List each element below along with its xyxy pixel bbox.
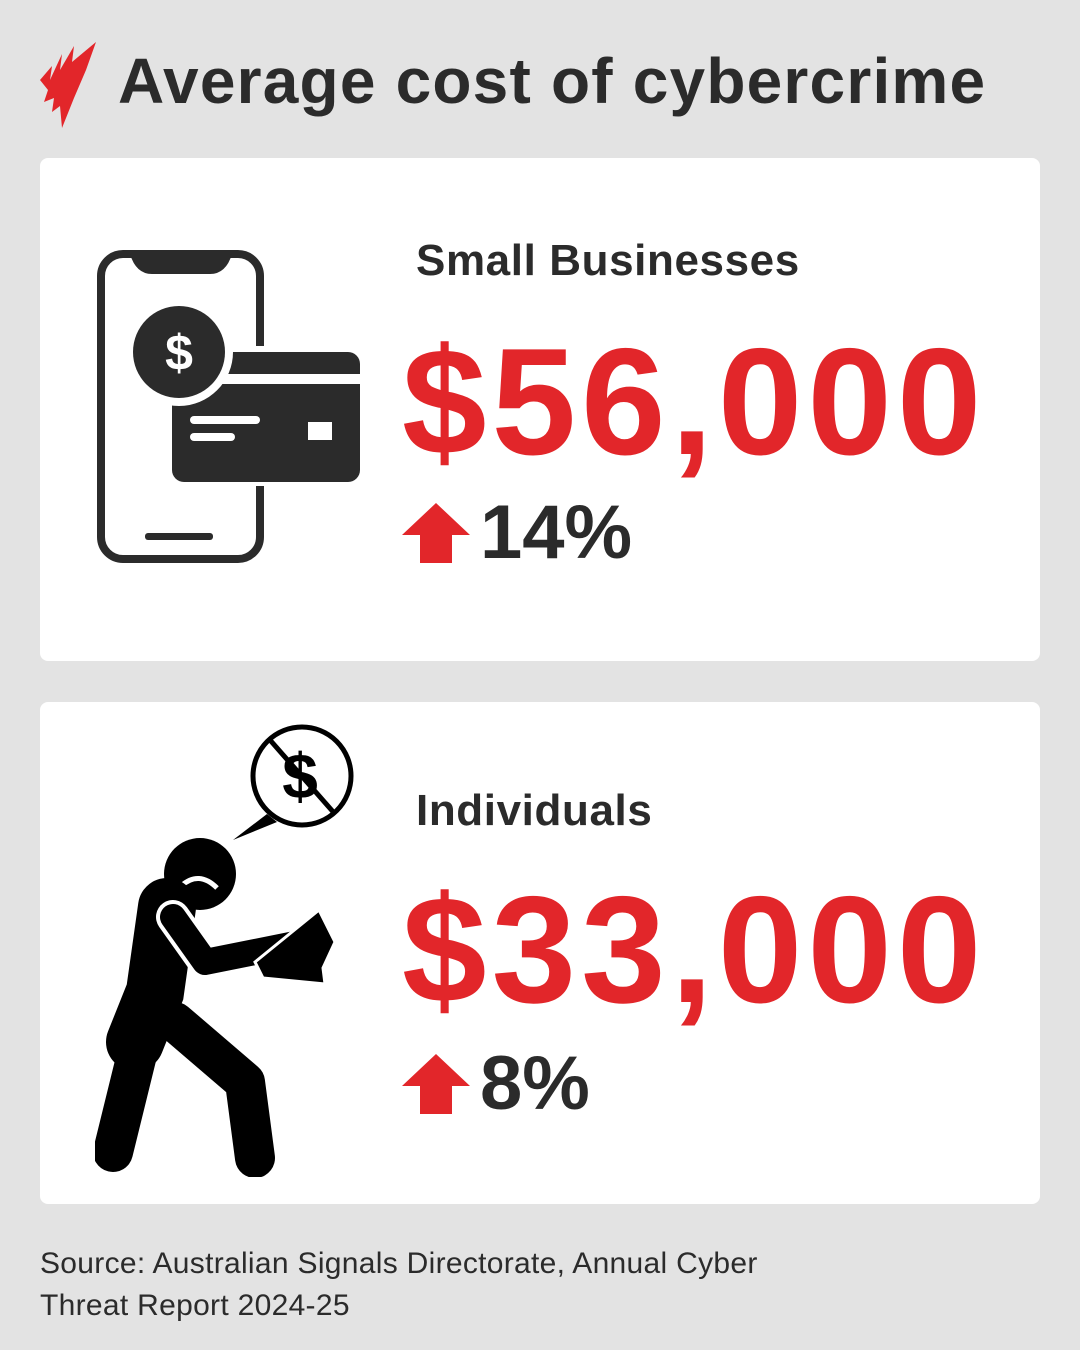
icon: phone with card: $ [165,325,193,381]
icon: distressed person [95,724,354,1177]
figure: $56,000: $56,000 [402,317,986,487]
panel: small businesses [40,158,1040,661]
figure: $33,000: $33,000 [402,865,986,1035]
icon: phone with card [97,250,360,563]
logo [40,42,96,128]
icon: up arrow [402,503,470,563]
title: Average cost of cybercrime [118,45,986,117]
change: up 14%: 14% [480,490,632,575]
panel: individuals [40,702,1040,1204]
source note: Threat Report 2024-25 [40,1289,350,1322]
heading: individuals: Individuals [416,786,652,835]
source note: Source: Australian Signals Directorate, Annual Cyber [40,1247,758,1280]
change: up 8%: 8% [480,1041,590,1126]
icon: distressed person: $ [282,740,318,812]
change: up 14% [402,490,632,575]
icon: up arrow [402,1054,470,1114]
change: up 8% [402,1041,590,1126]
heading: small businesses: Small Businesses [416,236,800,285]
source note [40,1247,758,1322]
